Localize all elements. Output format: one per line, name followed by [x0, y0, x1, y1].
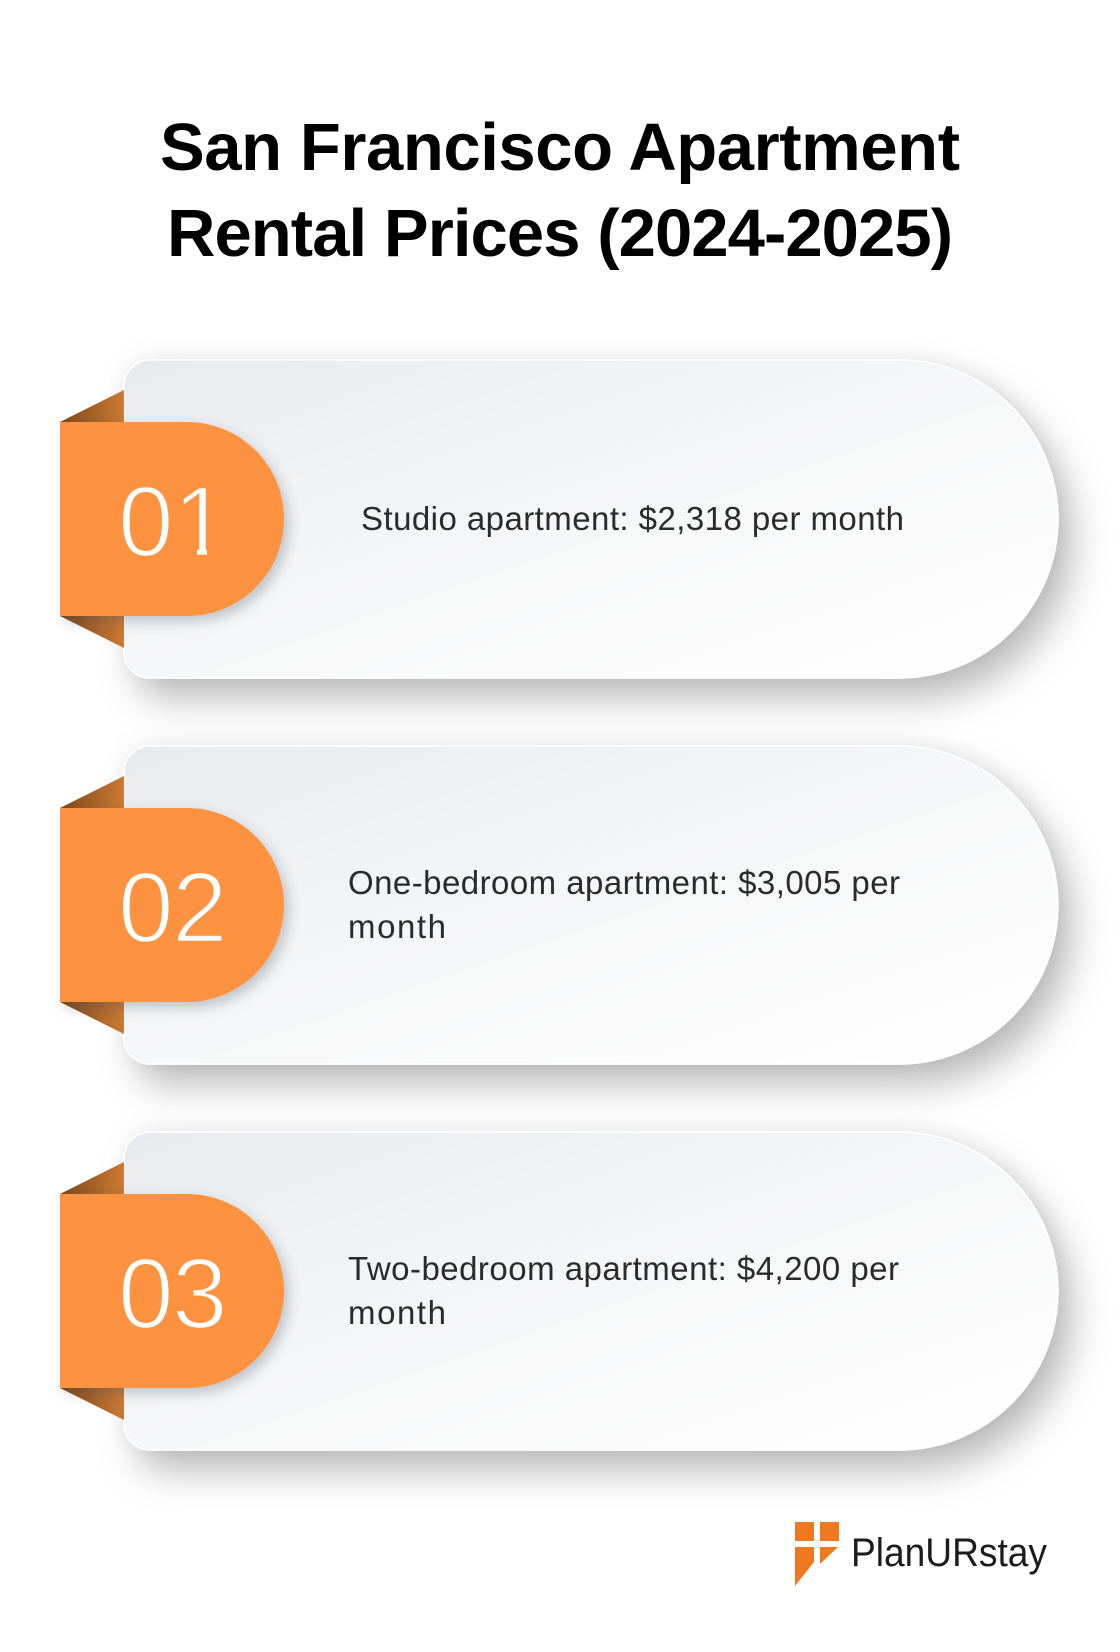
title: Rental Prices (2024-2025)	[167, 196, 953, 271]
number 02: 02	[118, 852, 228, 964]
logo wordmark: PlanURstay	[851, 1531, 1047, 1575]
panel: studio apartment	[60, 360, 1058, 678]
panel: one-bedroom apartment	[60, 746, 1058, 1064]
card background	[124, 746, 1058, 1064]
ribbon fold top	[60, 1162, 124, 1194]
number 01: 01	[118, 466, 229, 578]
title: San Francisco Apartment	[160, 110, 960, 185]
price text: One-bedroom apartment: $3,005 per	[348, 864, 900, 901]
number 03: 03	[118, 1238, 228, 1350]
ribbon fold bottom	[60, 1002, 124, 1034]
ribbon fold top	[60, 776, 124, 808]
card background	[124, 1132, 1058, 1450]
panel: two-bedroom apartment	[60, 1132, 1058, 1450]
number badge	[60, 422, 284, 616]
number badge	[60, 808, 284, 1002]
ribbon fold top	[60, 390, 124, 422]
card background	[124, 360, 1058, 678]
ribbon fold bottom	[60, 1388, 124, 1420]
title	[160, 110, 960, 271]
ribbon fold bottom	[60, 616, 124, 648]
price text continuation: month	[348, 1294, 446, 1331]
logo: PlanURstay	[795, 1522, 1047, 1586]
price text continuation: month	[348, 908, 446, 945]
number badge	[60, 1194, 284, 1388]
price text: Studio apartment: $2,318 per month	[361, 500, 904, 537]
price text: Two-bedroom apartment: $4,200 per	[348, 1250, 899, 1287]
icon: orange map pin blocks	[795, 1522, 839, 1586]
